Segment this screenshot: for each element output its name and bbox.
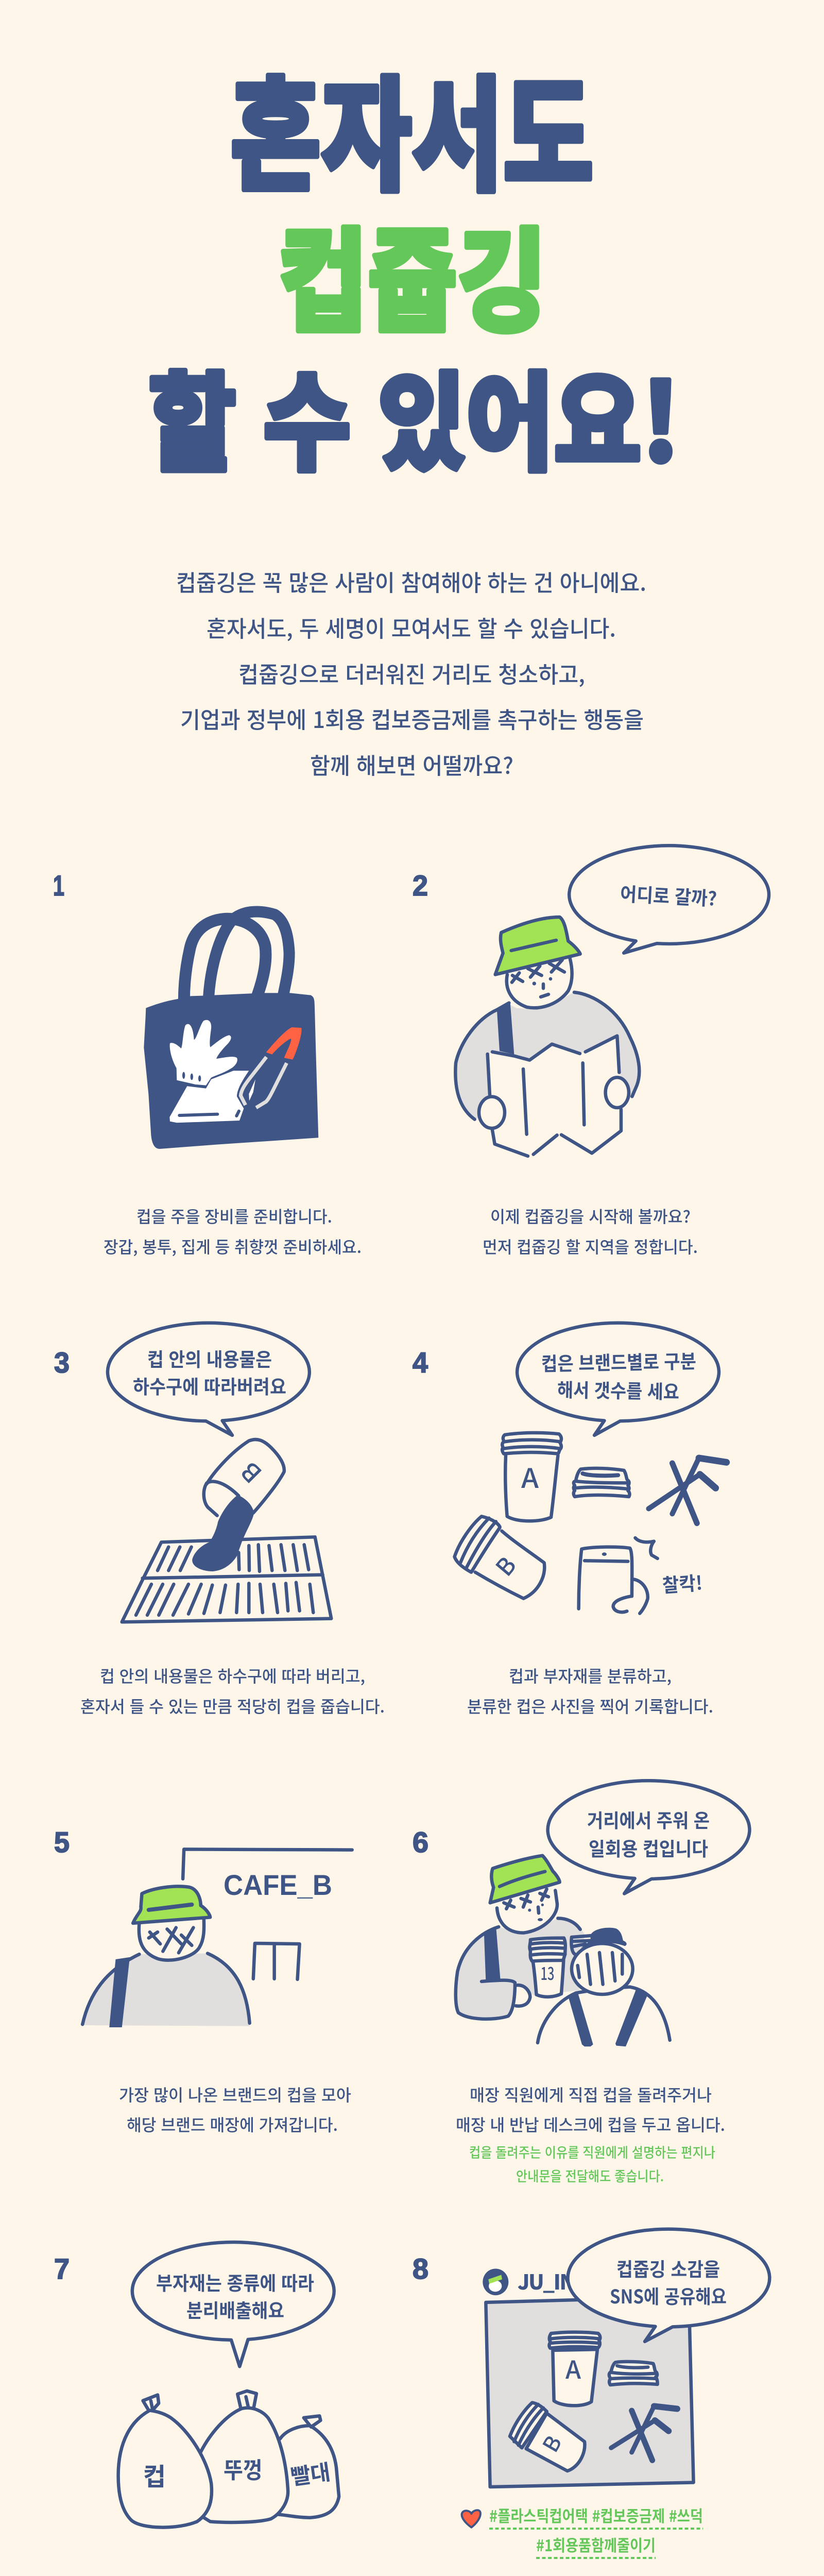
number 5: 5 (54, 1826, 70, 1858)
panel: step 2 (413, 845, 769, 1258)
speech bubble: sort by brand: 컵은 브랜드별로 구분 (541, 1346, 696, 1377)
number 3: 3 (54, 1346, 70, 1379)
number 2: 2 (413, 869, 428, 902)
letter A on cup: A (521, 1457, 539, 1496)
illustration: returning a cup to a staff member (456, 1856, 670, 2046)
step 2 caption: 먼저 컵줍깅 할 지역을 정합니다. (483, 1234, 698, 1258)
username: JU_IN (518, 2266, 575, 2296)
illustration: person in front of cafe (82, 1849, 352, 2027)
step 6 caption (456, 2082, 725, 2185)
illustration: three garbage bags (118, 2391, 339, 2528)
illustration: sns photo of sorted cups (486, 2300, 694, 2487)
step 5 caption (119, 2082, 351, 2136)
step 6 caption: 매장 내 반납 데스크에 컵을 두고 옵니다. (456, 2112, 725, 2136)
speech bubble: where to go (569, 845, 769, 953)
step 4 caption (467, 1664, 713, 1718)
step 6 caption: 매장 직원에게 직접 컵을 돌려주거나 (470, 2082, 712, 2106)
number 4: 4 (413, 1346, 428, 1379)
speech bubble: sort by brand (517, 1323, 719, 1435)
step 1 caption: 컵을 주을 장비를 준비합니다. (136, 1204, 332, 1228)
speech bubble: share on sns: SNS에 공유해요 (610, 2281, 727, 2309)
illustration: cups, lids, straws and phone (455, 1433, 727, 1614)
panel: step 1 (53, 869, 362, 1258)
letter A on cup: A (565, 2350, 581, 2386)
intro text: 기업과 정부에 1회용 컵보증금제를 촉구하는 행동을 (180, 702, 644, 735)
number 7: 7 (54, 2252, 70, 2285)
bag label: cup: 컵 (143, 2456, 166, 2493)
speech bubble: collected cups (548, 1781, 749, 1894)
hashtags: #플라스틱컵어택 #컵보증금제 #쓰덕 (489, 2503, 703, 2527)
avatar icon (483, 2268, 508, 2295)
intro text: 컵줍깅으로 더러워진 거리도 청소하고, (238, 656, 585, 689)
speech bubble: pour into drain: 하수구에 따라버려요 (133, 1371, 286, 1399)
step 3 caption (80, 1664, 385, 1718)
sign: CAFE_B: CAFE_B (224, 1869, 332, 1901)
panel: step 4 (413, 1323, 727, 1718)
speech bubble: sort by brand: 해서 갯수를 세요 (557, 1375, 680, 1404)
number 8: 8 (413, 2252, 428, 2285)
icon: heart (462, 2510, 480, 2528)
speech bubble: share on sns: 컵줍깅 소감을 (616, 2254, 720, 2282)
step 2 caption: 이제 컵줍깅을 시작해 볼까요? (490, 1204, 691, 1228)
step 3 caption: 컵 안의 내용물은 하수구에 따라 버리고, (100, 1664, 365, 1687)
speech bubble: collected cups: 일회용 컵입니다 (589, 1834, 708, 1861)
sound effect: click: 찰칵! (661, 1567, 703, 1598)
step 3 caption: 혼자서 들 수 있는 만큼 적당히 컵을 줍습니다. (80, 1694, 385, 1718)
speech bubble: separate materials: 부자재는 종류에 따라 (156, 2268, 314, 2296)
step 2 caption (483, 1204, 698, 1258)
number 1: 1 (53, 869, 64, 902)
step 6 caption: 컵을 돌려주는 이유를 직원에게 설명하는 편지나 (469, 2142, 715, 2162)
panel: step 5 (54, 1826, 352, 2136)
panel: step 6 (413, 1781, 749, 2185)
panel: step 7 (54, 2242, 346, 2576)
speech bubble: pour into drain: 컵 안의 내용물은 (147, 1344, 272, 1372)
speech bubble: collected cups: 거리에서 주워 온 (587, 1805, 710, 1833)
step 5 caption: 가장 많이 나온 브랜드의 컵을 모아 (119, 2082, 351, 2106)
speech bubble: separate materials: 분리배출해요 (186, 2295, 284, 2323)
title: 할 수 있어요! (148, 337, 680, 492)
intro text: 컵줍깅은 꼭 많은 사람이 참여해야 하는 건 아니에요. (176, 565, 646, 598)
step 4 caption: 컵과 부자재를 분류하고, (509, 1664, 672, 1687)
panel: step 3 (54, 1323, 385, 1718)
intro text: 혼자서도, 두 세명이 모여서도 할 수 있습니다. (207, 611, 616, 643)
illustration: person reading a map (455, 917, 639, 1157)
hashtags: #1회용품함께줄이기 (536, 2533, 656, 2556)
letter B on cup: B (487, 1549, 523, 1583)
speech bubble: pour into drain (108, 1323, 310, 1435)
letter B on cup: 13 (541, 1960, 554, 1985)
letter B on cup: B (231, 1455, 268, 1493)
step 4 caption: 분류한 컵은 사진을 찍어 기록합니다. (467, 1694, 713, 1718)
speech bubble: share on sns (568, 2229, 769, 2342)
icon: tote bag with glove and tongs (144, 911, 318, 1149)
number 6: 6 (413, 1826, 428, 1858)
title: 컵줍깅 (278, 191, 547, 354)
bag label: lid: 뚜껑 (224, 2452, 263, 2485)
illustration: pouring a cup into a drain grate (122, 1439, 331, 1622)
panel: step 8 (413, 2229, 769, 2576)
intro text (176, 565, 646, 781)
letter B on cup: B (534, 2429, 568, 2458)
step 1 caption: 장갑, 봉투, 집게 등 취향껏 준비하세요. (104, 1234, 362, 1258)
speech bubble: separate materials (132, 2242, 334, 2366)
title (148, 36, 680, 492)
speech bubble: where to go: 어디로 갈까? (620, 878, 717, 911)
step 1 caption (104, 1204, 362, 1258)
step 6 caption: 안내문을 전달해도 좋습니다. (516, 2165, 664, 2185)
bag label: straw: 빨대 (288, 2455, 332, 2492)
title: 혼자서도 (230, 36, 594, 216)
hashtags (489, 2503, 703, 2558)
intro text: 함께 해보면 어떨까요? (310, 748, 513, 781)
step 5 caption: 해당 브랜드 매장에 가져갑니다. (127, 2112, 338, 2136)
